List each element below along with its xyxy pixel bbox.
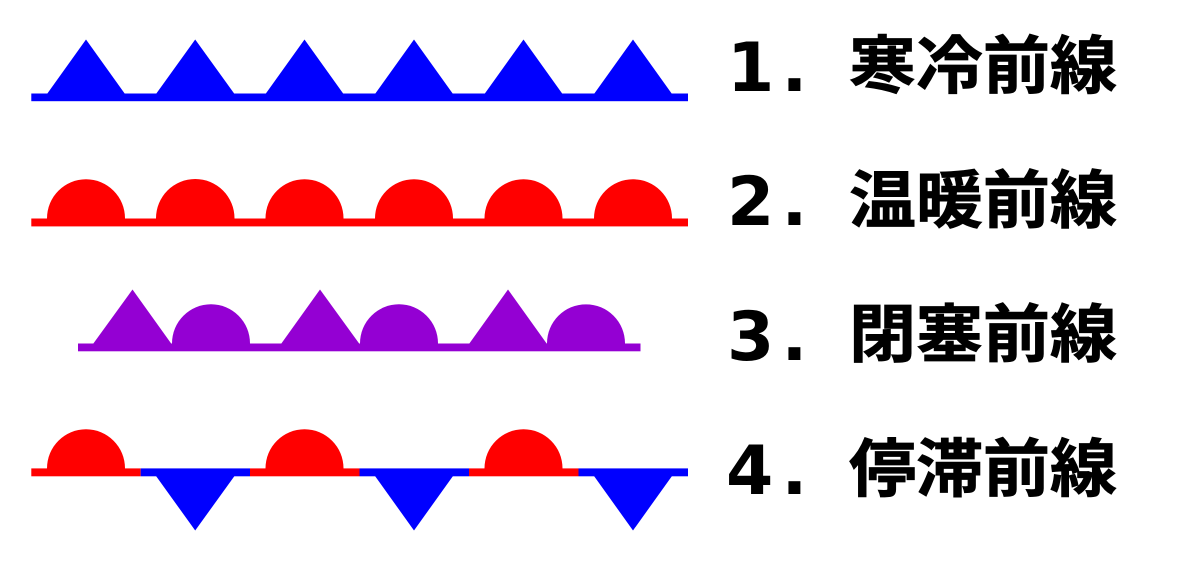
label: stationary front — [726, 418, 1117, 511]
cold front symbol — [31, 40, 688, 101]
label: cold front: 1 — [727, 29, 774, 108]
label: warm front: 温暖前線 — [849, 150, 1117, 241]
label: occluded front: . — [782, 298, 807, 377]
stationary front symbol — [31, 429, 688, 530]
label: warm front: . — [782, 163, 807, 242]
label: stationary front: 停滞前線 — [849, 418, 1117, 509]
label: cold front — [727, 15, 1117, 108]
label: occluded front: 閉塞前線 — [849, 284, 1117, 375]
label: warm front: 2 — [727, 163, 774, 242]
label: stationary front: 4 — [726, 432, 773, 511]
label: occluded front: 3 — [727, 298, 774, 377]
warm front symbol — [31, 179, 688, 226]
occluded front symbol — [78, 290, 640, 351]
label: cold front: 寒冷前線 — [849, 15, 1117, 106]
label: occluded front — [727, 284, 1117, 377]
label: stationary front: . — [782, 432, 807, 511]
label: cold front: . — [782, 29, 807, 108]
label: warm front — [727, 150, 1117, 242]
